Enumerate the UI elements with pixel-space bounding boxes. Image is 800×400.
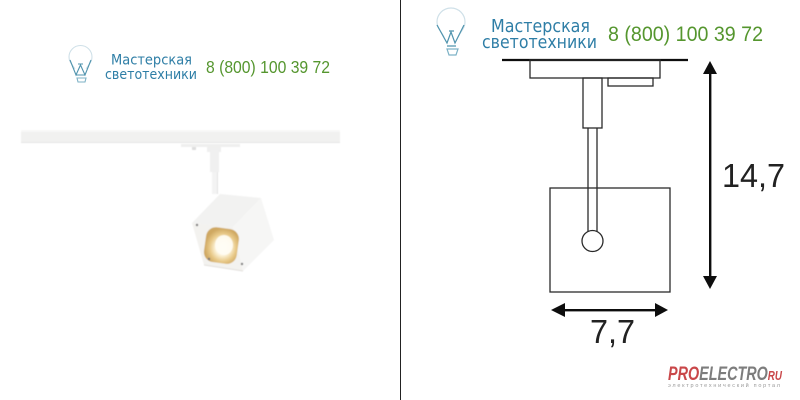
ceiling line (502, 59, 688, 61)
side clip (608, 78, 653, 86)
watermark wordmark: PROELECTRORU (668, 364, 782, 385)
phone number, right: 8 (800) 100 39 72 (608, 22, 763, 46)
track adapter outline (530, 60, 660, 78)
height label: 14,7 (722, 157, 785, 194)
brand name, right: Мастерская (491, 16, 590, 37)
pivot joint (582, 230, 603, 252)
track rail (21, 130, 340, 143)
lamp opening (203, 226, 240, 265)
height arrow (703, 61, 717, 289)
width arrow (551, 303, 668, 317)
upper stem (583, 78, 602, 128)
brand name, right: светотехники (482, 32, 597, 53)
watermark logo (668, 364, 782, 389)
brand name, right (482, 16, 597, 53)
panel divider (400, 0, 402, 400)
phone number, left: 8 (800) 100 39 72 (206, 57, 330, 77)
brand name, left (105, 52, 197, 83)
brand name, left: Мастерская (111, 52, 192, 68)
rod (588, 128, 597, 232)
track adapter (181, 144, 240, 194)
dimension drawing (502, 60, 688, 292)
spotlight cube (192, 194, 274, 271)
watermark tagline: электротехнический портал (668, 382, 780, 389)
icon: light bulb, left (69, 46, 92, 82)
product photo: track spotlight (21, 130, 340, 271)
width label: 7,7 (590, 313, 635, 350)
right logo (437, 8, 763, 55)
brand name, left: светотехники (105, 67, 197, 83)
icon: light bulb, right (437, 8, 465, 55)
fixture body (550, 188, 670, 292)
left logo (69, 46, 330, 83)
